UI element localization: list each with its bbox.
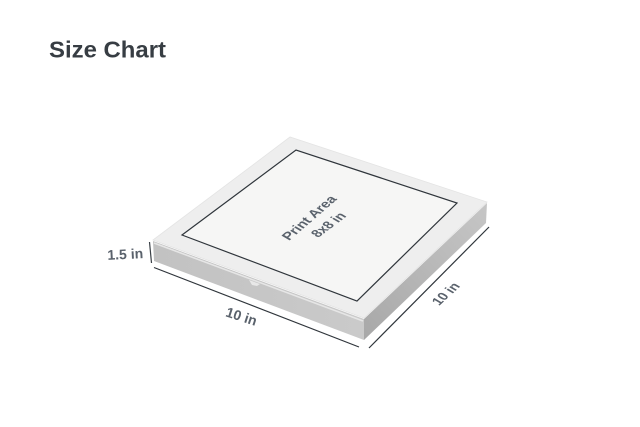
front width dimension: 10 in bbox=[224, 304, 259, 329]
box right side bbox=[364, 203, 487, 340]
box top face bbox=[153, 137, 487, 318]
print area label: 8x8 in bbox=[307, 210, 350, 240]
title: Size Chart bbox=[49, 36, 166, 62]
height dimension: 1.5 in bbox=[107, 245, 144, 263]
height dimension bbox=[107, 242, 152, 263]
right depth dimension: 10 in bbox=[428, 280, 463, 308]
front width dimension bbox=[154, 268, 359, 347]
box tab bbox=[249, 280, 260, 286]
print area bbox=[182, 150, 457, 301]
box bbox=[153, 137, 487, 340]
lid edge highlight bbox=[154, 243, 363, 321]
right depth dimension bbox=[369, 227, 489, 348]
box front side bbox=[153, 241, 364, 340]
print area label: Print Area bbox=[279, 193, 340, 243]
